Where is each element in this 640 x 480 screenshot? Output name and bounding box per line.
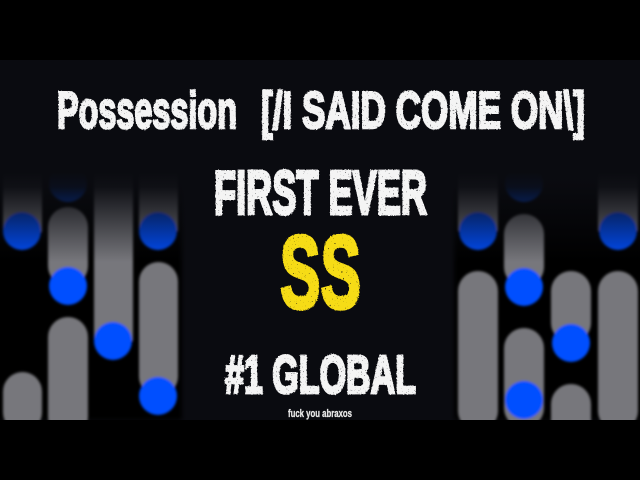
rank: SS: SS bbox=[280, 215, 361, 331]
lane 4 notes right bbox=[598, 165, 638, 431]
lane 1 notes bbox=[3, 165, 42, 432]
lane 3 notes bbox=[94, 165, 133, 360]
caption: fuck you abraxos bbox=[288, 408, 352, 420]
lane 2 notes bbox=[48, 164, 88, 437]
letterbox bottom bar bbox=[0, 420, 640, 480]
heading: first ever: FIRST EVER bbox=[214, 159, 427, 228]
heading: number one global: #1 GLOBAL bbox=[225, 345, 416, 405]
background panel bbox=[0, 60, 640, 420]
lane 2 notes right bbox=[504, 164, 544, 428]
lane 1 notes right bbox=[458, 165, 498, 431]
lane 3 notes right bbox=[551, 271, 591, 444]
top fade overlay bbox=[0, 150, 640, 262]
panel: right note lanes bbox=[454, 164, 640, 444]
panel: left note lanes bbox=[0, 164, 182, 437]
title: song name: Possession bbox=[57, 82, 237, 140]
letterbox top bar bbox=[0, 0, 640, 60]
lane 4 notes bbox=[139, 165, 178, 415]
